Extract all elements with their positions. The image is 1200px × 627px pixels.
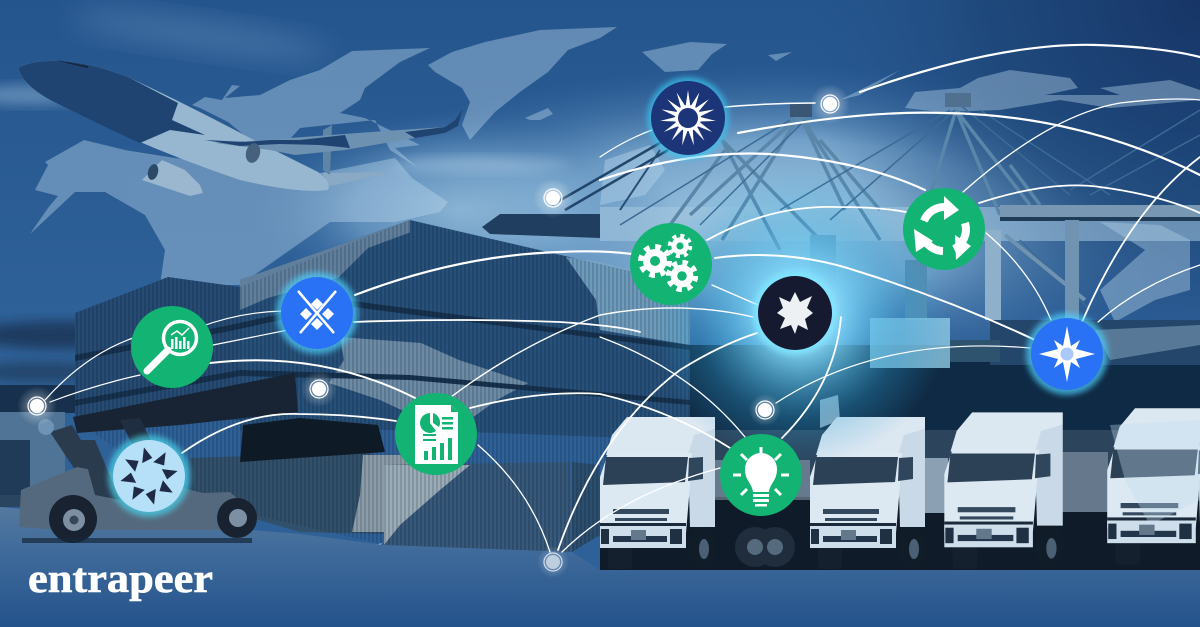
icon: navy burst node [647,77,729,159]
icon: magnifier with chart [131,306,213,388]
network arcs [45,45,1200,552]
world map land masses [30,27,1200,322]
warehouse on left [0,385,75,507]
cargo ship and quay wall [690,318,1200,500]
delivery trucks [600,408,1200,570]
container port cranes [482,93,1200,320]
network node dots [17,84,850,578]
ground [0,507,1200,627]
map overlay on last truck [1110,420,1200,525]
icon: dark star node [753,271,837,355]
airplane [18,60,463,196]
stacked shipping containers [75,220,690,570]
icon: gears [630,223,712,305]
icon: blue crossed swords [276,272,358,354]
icon: recycle arrows [903,188,985,270]
icon: light blue sunburst [108,435,190,517]
icon: lightbulb [720,434,802,516]
forklift container handler [19,373,385,543]
icon: blue compass star [1026,313,1108,395]
icon: report document [395,393,477,475]
logo wordmark: entrapeer [28,555,213,601]
central light flare [650,165,950,465]
